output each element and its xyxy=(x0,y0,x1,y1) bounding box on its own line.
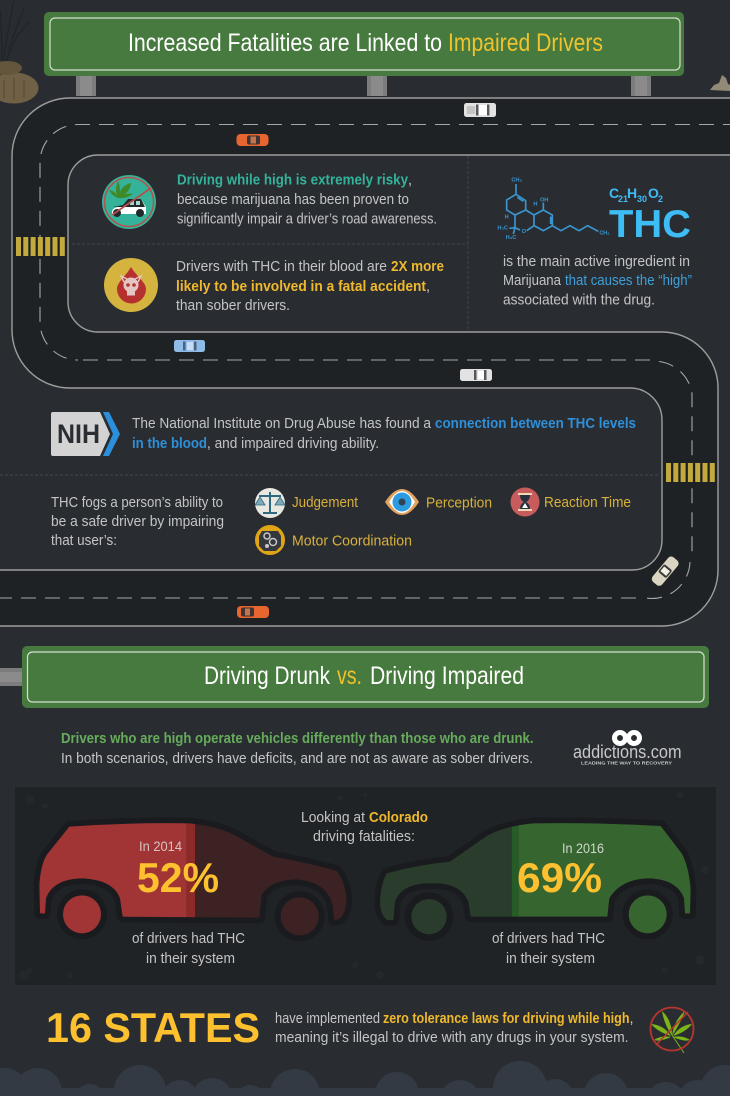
icon: perception eye xyxy=(385,489,419,515)
icon: no marijuana xyxy=(650,1008,694,1053)
stat: 2016: in their system xyxy=(506,951,595,967)
second sign: Driving Impaired xyxy=(370,662,524,690)
addictions.com logo: addictions.com xyxy=(573,742,682,762)
car: orange top xyxy=(236,134,268,146)
THC molecule xyxy=(497,177,610,241)
text: THC fogs: THC fogs a person’s ability to xyxy=(51,495,223,511)
icon: reaction time hourglass xyxy=(510,488,540,516)
stat: 2016: of drivers had THC xyxy=(492,931,605,947)
heading: 16 states: 16 STATES xyxy=(46,1004,260,1051)
text: looking at Colorado: driving fatalities: xyxy=(313,829,415,845)
icon: motor coordination xyxy=(255,525,285,555)
second sign post xyxy=(0,668,22,686)
title sign xyxy=(44,12,684,76)
THC formula: 2 xyxy=(658,194,663,204)
text: NIH finding: connection between THC levels xyxy=(435,416,636,432)
panel dividers xyxy=(0,156,660,475)
label: reaction time: Reaction Time xyxy=(544,495,631,511)
text: NIH finding: in the blood xyxy=(132,436,207,452)
text: drivers high vs drunk: Drivers who are high operate vehicles differently than those who are drunk. xyxy=(61,731,534,747)
text: THC description: Marijuana xyxy=(503,273,562,289)
car: blue xyxy=(174,340,205,352)
THC molecule: H xyxy=(505,214,509,220)
background plant xyxy=(0,0,30,62)
NIH logo: NIH xyxy=(57,419,100,449)
stat: 2014: In 2014 xyxy=(139,838,182,854)
title text white: Increased Fatalities are Linked to xyxy=(128,29,442,57)
car chart: 2016 green xyxy=(370,815,698,941)
icon: judgement scales xyxy=(255,488,285,518)
text: 2X more likely: than sober drivers. xyxy=(176,298,290,314)
stat: 2014 xyxy=(132,838,245,967)
stat: 2016: In 2016 xyxy=(562,840,604,856)
text: THC description: is the main active ingredient in xyxy=(503,254,690,270)
THC molecule: H₃C xyxy=(506,235,516,241)
THC formula: 30 xyxy=(637,194,647,204)
text: driving while high: significantly impair a driver’s road awareness. xyxy=(177,212,437,228)
THC molecule: CH₃ xyxy=(599,231,610,237)
THC formula: O xyxy=(648,185,659,201)
THC molecule: O xyxy=(522,229,527,235)
car: white middle xyxy=(460,369,492,381)
text: driving while high: because marijuana has been proven to xyxy=(177,192,409,208)
panel: Colorado fatalities xyxy=(15,787,716,985)
winding road xyxy=(0,98,730,626)
text: looking at Colorado: Colorado xyxy=(369,810,428,826)
text: looking at Colorado: Looking at xyxy=(301,810,365,826)
THC molecule: H₃C xyxy=(497,226,508,232)
text: driving while high: , xyxy=(408,172,412,188)
text: zero tolerance laws: zero tolerance laws for driving while high xyxy=(383,1011,630,1027)
addictions.com logo xyxy=(573,732,682,766)
text: THC fogs: that user’s: xyxy=(51,533,117,549)
addictions.com logo: LEADING THE WAY TO RECOVERY xyxy=(581,760,672,766)
text: zero tolerance laws xyxy=(275,1011,634,1046)
THC heading: THC xyxy=(609,203,691,246)
crosswalk right xyxy=(666,463,715,482)
text: NIH finding: The National Institute on Drug Abuse has found a xyxy=(132,416,432,432)
clouds xyxy=(0,1061,730,1096)
text: drivers high vs drunk xyxy=(61,731,534,767)
THC formula xyxy=(609,185,663,204)
THC formula: C xyxy=(609,185,619,201)
car: white top xyxy=(464,103,496,117)
text: zero tolerance laws: meaning it’s illegal to drive with any drugs in your system. xyxy=(275,1030,628,1046)
title text yellow: Impaired Drivers xyxy=(448,29,603,57)
THC formula: H xyxy=(627,185,637,201)
second sign: vs. xyxy=(337,662,362,690)
label: judgement: Judgement xyxy=(292,495,358,511)
sign posts xyxy=(76,76,651,96)
icon: no driving while high xyxy=(102,175,156,229)
text: NIH finding: , and impaired driving ability. xyxy=(207,436,379,452)
icon: blood drop skull xyxy=(104,258,158,312)
text: THC description xyxy=(503,254,692,308)
stat: 2016: 69% xyxy=(517,854,602,901)
text: THC description: that causes the “high” xyxy=(565,273,692,289)
crosswalk left xyxy=(16,237,65,256)
car: orange bottom xyxy=(237,606,269,618)
label: motor coordination: Motor Coordination xyxy=(292,534,412,550)
stat: 2016 xyxy=(492,840,605,967)
text: 2X more likely: 2X more xyxy=(391,259,444,275)
THC molecule: CH₃ xyxy=(511,177,522,183)
text: 2X more likely: , xyxy=(426,279,430,295)
text: driving while high: Driving while high is extremely risky xyxy=(177,172,408,188)
THC molecule: OH xyxy=(540,197,548,203)
THC molecule: H xyxy=(533,201,537,207)
THC formula: 21 xyxy=(618,194,628,204)
car chart: 2014 red xyxy=(30,815,355,941)
label: perception: Perception xyxy=(426,496,492,512)
text: driving while high xyxy=(177,172,437,228)
car: beige turning xyxy=(650,555,680,587)
second sign xyxy=(22,646,709,708)
text: 2X more likely: likely to be involved in a fatal accident xyxy=(176,279,426,295)
NIH logo xyxy=(51,412,120,456)
text: THC fogs: be a safe driver by impairing xyxy=(51,514,224,530)
text: THC description: associated with the drug. xyxy=(503,292,655,308)
text: zero tolerance laws: , xyxy=(630,1011,634,1027)
second sign: Driving Drunk xyxy=(204,662,330,690)
text: THC fogs xyxy=(51,495,224,549)
text: drivers high vs drunk: In both scenarios, drivers have deficits, and are not as aware as sober drivers. xyxy=(61,751,533,767)
text: NIH finding xyxy=(132,416,636,452)
background rocks left xyxy=(0,61,38,104)
stat: 2014: 52% xyxy=(137,854,219,901)
text: 2X more likely: Drivers with THC in their blood are xyxy=(176,259,387,275)
background rock right xyxy=(710,75,730,91)
text: looking at Colorado xyxy=(301,810,428,845)
stat: 2014: of drivers had THC xyxy=(132,931,245,947)
stat: 2014: in their system xyxy=(146,951,235,967)
text: 2X more likely xyxy=(176,259,444,314)
text: zero tolerance laws: have implemented xyxy=(275,1011,380,1027)
